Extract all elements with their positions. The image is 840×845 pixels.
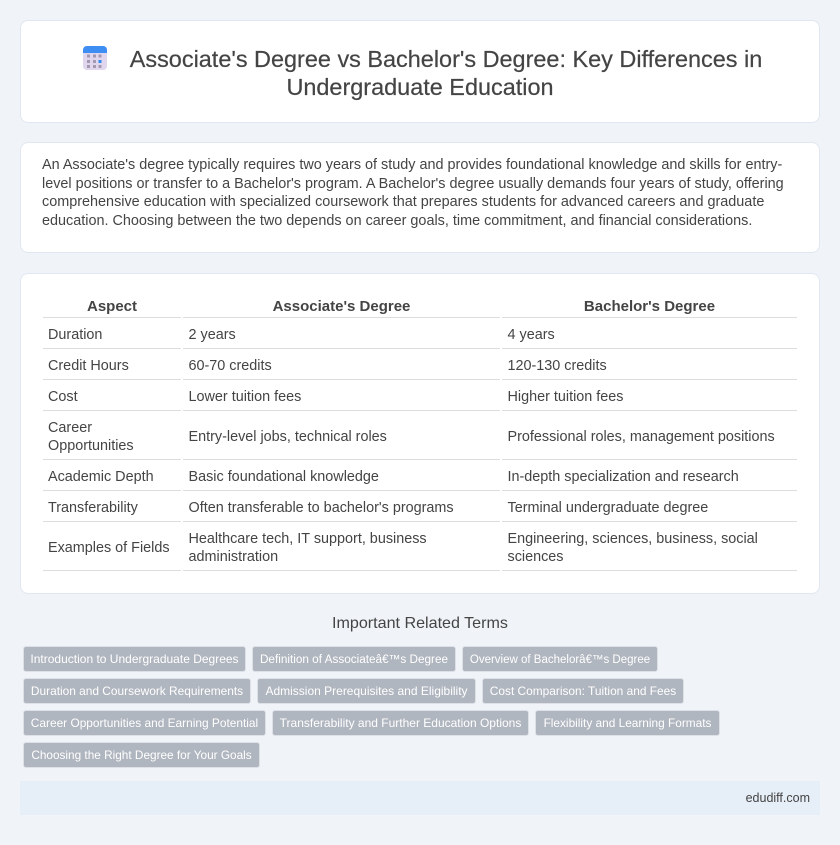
tag: Duration and Coursework Requirements [31, 684, 243, 698]
footer bar [20, 781, 820, 815]
comparison table: Career [48, 420, 92, 436]
tag [272, 710, 529, 736]
tag [252, 646, 456, 672]
comparison table: Engineering, sciences, business, social [508, 531, 758, 547]
comparison table: Duration [48, 327, 102, 343]
comparison table: In-depth specialization and research [508, 469, 739, 485]
intro paragraph card [20, 142, 820, 253]
related terms heading: Important Related Terms [332, 614, 508, 632]
tag: Cost Comparison: Tuition and Fees [490, 684, 676, 698]
comparison table: Aspect [87, 298, 137, 315]
comparison table: Cost [48, 389, 78, 405]
footer source text: edudiff.com [746, 791, 810, 805]
tag [23, 742, 260, 768]
tag: Definition of Associateâ€™s Degree [260, 653, 448, 666]
title [130, 46, 762, 100]
comparison table: Examples of Fields [48, 540, 170, 556]
header card [20, 20, 820, 123]
tag [535, 710, 720, 736]
comparison table: sciences [508, 549, 564, 565]
intro paragraph [42, 157, 784, 229]
title: Undergraduate Education [286, 74, 554, 100]
intro paragraph: comprehensive education with specialized coursework that prepares students for advanced careers and graduate [42, 194, 764, 210]
related term tags [23, 646, 720, 768]
tag [482, 678, 684, 704]
tag: Admission Prerequisites and Eligibility [265, 684, 468, 698]
comparison table: Higher tuition fees [508, 389, 624, 405]
comparison table: 2 years [188, 327, 236, 343]
tag [23, 710, 266, 736]
comparison table: Bachelor's Degree [584, 298, 715, 315]
tag [23, 646, 246, 672]
tag: Career Opportunities and Earning Potential [31, 716, 258, 730]
comparison table: Transferability [48, 500, 138, 516]
intro paragraph: An Associate's degree typically requires two years of study and provides foundational knowledge and skills for entry- [42, 157, 782, 173]
tag: Overview of Bachelorâ€™s Degree [470, 654, 650, 666]
comparison table: Healthcare tech, IT support, business [188, 531, 427, 547]
comparison table: Professional roles, management positions [508, 429, 775, 445]
comparison table: Terminal undergraduate degree [508, 500, 708, 516]
tag: Introduction to Undergraduate Degrees [30, 652, 239, 666]
comparison table: 60-70 credits [188, 358, 272, 374]
tag [462, 646, 658, 672]
tag [23, 678, 251, 704]
comparison table card [20, 273, 820, 594]
comparison table: Associate's Degree [273, 298, 410, 315]
intro paragraph: level positions or transfer to a Bachelor's program. A Bachelor's degree usually demands four years of study, offering [42, 176, 784, 192]
comparison table: Opportunities [48, 438, 134, 454]
comparison table: Basic foundational knowledge [188, 469, 379, 485]
comparison table: 4 years [508, 327, 555, 343]
comparison table: Entry-level jobs, technical roles [188, 429, 387, 445]
intro paragraph: education. Choosing between the two depends on career goals, time commitment, and financial considerations. [42, 213, 752, 229]
comparison table: Often transferable to bachelor's programs [188, 500, 454, 516]
title: Associate's Degree vs Bachelor's Degree: Key Differences in [130, 46, 762, 72]
tag: Choosing the Right Degree for Your Goals [31, 748, 252, 762]
comparison table: 120-130 credits [508, 358, 607, 374]
tag [257, 678, 476, 704]
comparison table: Credit Hours [48, 358, 129, 374]
comparison table: Lower tuition fees [188, 389, 301, 405]
icon: calendar [83, 46, 107, 70]
comparison table [43, 298, 797, 571]
comparison table: Academic Depth [48, 469, 154, 485]
comparison table: administration [188, 549, 278, 565]
tag: Flexibility and Learning Formats [544, 716, 711, 730]
tag: Transferability and Further Education Options [280, 716, 521, 730]
